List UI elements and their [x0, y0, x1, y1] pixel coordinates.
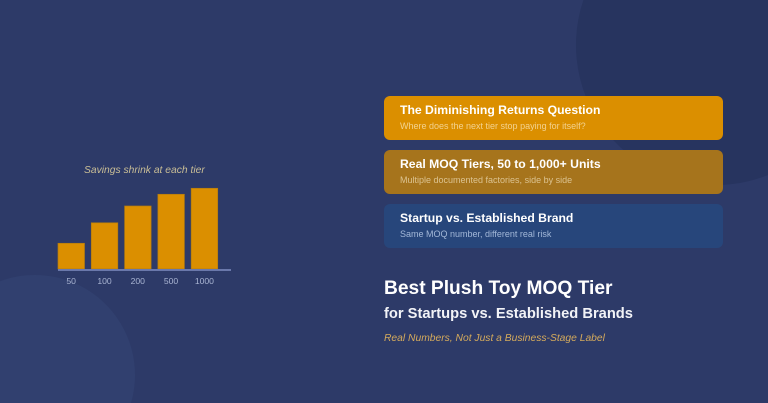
card: startup vs established: Same MOQ number, different real risk [400, 229, 551, 239]
card: real MOQ tiers [384, 150, 723, 194]
axis line [58, 269, 231, 271]
axis labels: 500 [164, 276, 178, 286]
chart caption: Savings shrink at each tier [84, 165, 205, 176]
card: diminishing returns [384, 96, 723, 140]
axis labels: 50 [66, 276, 76, 286]
axis labels [66, 276, 214, 286]
axis labels: 200 [131, 276, 145, 286]
card: diminishing returns: Where does the next tier stop paying for itself? [400, 121, 586, 131]
bars [58, 188, 218, 269]
card: real MOQ tiers: Multiple documented factories, side by side [400, 175, 572, 185]
axis labels: 100 [97, 276, 112, 286]
card: startup vs established [384, 204, 723, 248]
axis labels: 1000 [195, 276, 214, 286]
card: real MOQ tiers: Real MOQ Tiers, 50 to 1,000+ Units [400, 157, 601, 171]
bar chart [58, 188, 231, 286]
tagline: Real Numbers, Not Just a Business-Stage Label [384, 333, 605, 344]
title: Best Plush Toy MOQ Tier [384, 278, 613, 299]
card: startup vs established: Startup vs. Established Brand [400, 211, 573, 225]
card: diminishing returns: The Diminishing Returns Question [400, 103, 600, 117]
subtitle: for Startups vs. Established Brands [384, 306, 633, 322]
